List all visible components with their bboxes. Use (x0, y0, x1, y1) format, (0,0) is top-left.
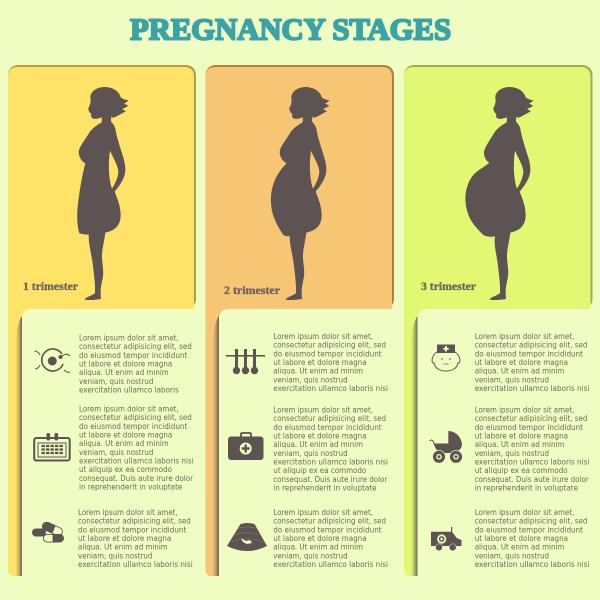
text: second trimester block 2: consequat. Duis aute irure dolor (273, 474, 388, 484)
text: first trimester block 2 (79, 404, 194, 492)
text: second trimester block 3 (273, 507, 388, 569)
text: second trimester block 2: veniam, quis nostrud (273, 448, 348, 458)
text: third trimester block 3: aliqua. Ut enim ad minim (475, 542, 564, 552)
text: first trimester block 2: aliqua. Ut enim ad minim (79, 438, 169, 448)
text: third trimester block 3: ut labore et dolore magna (475, 533, 568, 543)
text: second trimester block 2: Lorem ipsum dolor sit amet, (273, 404, 373, 414)
icon: ambulance (431, 527, 462, 551)
text: third trimester block 1: Lorem ipsum dolor sit amet, (475, 331, 574, 341)
text: first trimester block 1 (79, 332, 192, 394)
panel: third trimester (404, 65, 592, 576)
silhouette: first trimester (77, 87, 129, 300)
text: second trimester block 3: aliqua. Ut enim ad minim (273, 542, 363, 552)
text: first trimester block 2: ut aliquip ex ea commodo (79, 464, 172, 474)
panel: second trimester (206, 65, 394, 576)
text: first trimester block 3: exercitation ullamco laboris nisi (78, 559, 193, 569)
text: third trimester block 2: do eiusmod tempor incididunt (475, 422, 584, 432)
text: first trimester block 3: Lorem ipsum dolor sit amet, (78, 507, 178, 517)
text: first trimester block 1: consectetur adipisicing elit, sed (79, 341, 192, 351)
text: first trimester block 2: in reprehenderit in voluptate (79, 482, 182, 492)
text: first trimester block 3: consectetur adipisicing elit, sed (78, 516, 191, 526)
text: first trimester block 1: exercitation ullamco laboris (79, 384, 179, 394)
text: first trimester block 1: veniam, quis nostrud (79, 376, 153, 386)
text: first trimester block 2: Lorem ipsum dolor sit amet, (79, 404, 179, 414)
icon: ultrasound scan (227, 523, 267, 551)
text: second trimester block 1: Lorem ipsum dolor sit amet, (273, 331, 373, 341)
label: 2 trimester: 2 trimester (224, 285, 280, 297)
text: third trimester block 2 (475, 404, 589, 492)
label: 1 trimester: 1 trimester (23, 281, 78, 293)
text: first trimester block 1: aliqua. Ut enim ad minim (79, 367, 169, 377)
text: first trimester block 3 (78, 507, 193, 569)
text: third trimester block 3: Lorem ipsum dolor sit amet, (475, 507, 574, 517)
text: third trimester block 1: veniam, quis nostrud (475, 374, 549, 384)
text: first trimester block 1: Lorem ipsum dolor sit amet, (79, 332, 179, 342)
text: second trimester block 1: exercitation ullamco laboris nisi (273, 383, 388, 393)
text: second trimester block 1: veniam, quis nostrud (273, 374, 348, 384)
icon: sperm and egg (34, 349, 70, 372)
text: third trimester block 2: ut aliquip ex ea commodo (475, 465, 568, 475)
icon: baby stroller (430, 431, 462, 463)
text: first trimester block 2: consectetur adipisicing elit, sed (79, 412, 192, 422)
text: second trimester block 2: ut aliquip ex ea commodo (273, 465, 366, 475)
text: third trimester block 1: aliqua. Ut enim ad minim (475, 366, 564, 376)
text: second trimester block 1: aliqua. Ut enim ad minim (273, 366, 363, 376)
text: first trimester block 3: veniam, quis nostrud (78, 550, 152, 560)
icon: medical kit (228, 433, 264, 460)
text: second trimester block 3: do eiusmod tempor incididunt (273, 524, 382, 534)
label: 3 trimester: 3 trimester (421, 281, 476, 293)
text: third trimester block 2: in reprehenderit in voluptate (475, 482, 578, 492)
text: third trimester block 2: aliqua. Ut enim ad minim (475, 439, 564, 449)
text: first trimester block 3: do eiusmod tempor incididunt (78, 524, 187, 534)
text: second trimester block 1: do eiusmod tempor incididunt (273, 348, 382, 358)
text: first trimester block 2: consequat. Duis aute irure dolor (79, 473, 194, 483)
text: second trimester block 2 (273, 404, 388, 492)
text: first trimester block 2: do eiusmod tempor incididunt (79, 421, 188, 431)
text: third trimester block 2: ut labore et dolore magna (475, 430, 568, 440)
text: second trimester block 1: ut labore et dolore magna (273, 357, 367, 367)
text: third trimester block 1 (475, 331, 589, 393)
text: second trimester block 2: exercitation ullamco laboris nisi (273, 456, 388, 466)
text: third trimester block 2: veniam, quis nostrud (475, 448, 549, 458)
icon: calendar (34, 433, 70, 460)
icon: pills (32, 521, 64, 542)
text: first trimester block 2: veniam, quis nostrud (79, 447, 153, 457)
text: first trimester block 2: ut labore et dolore magna (79, 430, 172, 440)
text: second trimester block 2: ut labore et dolore magna (273, 430, 367, 440)
text: third trimester block 3: veniam, quis nostrud (475, 550, 549, 560)
icon: baby in nurse hat (432, 344, 460, 371)
text: second trimester block 2: do eiusmod tempor incididunt (273, 422, 382, 432)
text: second trimester block 2: in reprehenderit in voluptate (273, 482, 377, 492)
text: first trimester block 1: ut labore et dolore magna (79, 358, 172, 368)
panel: first trimester (8, 65, 196, 576)
text: third trimester block 1: do eiusmod tempor incididunt (475, 348, 584, 358)
text: second trimester block 3: ut labore et dolore magna (273, 533, 367, 543)
silhouette: third trimester (465, 87, 534, 300)
text: first trimester block 3: ut labore et dolore magna (78, 533, 171, 543)
text: second trimester block 3: veniam, quis nostrud (273, 550, 348, 560)
text: third trimester block 1: ut labore et dolore magna (475, 357, 568, 367)
text: second trimester block 1: consectetur adipisicing elit, sed (273, 340, 386, 350)
title: PREGNANCY STAGES (130, 12, 451, 46)
text: second trimester block 2: consectetur adipisicing elit, sed (273, 413, 386, 423)
icon: test tubes (226, 349, 265, 374)
text: second trimester block 3: exercitation ullamco laboris nisi (273, 559, 388, 569)
text: first trimester block 2: exercitation ullamco laboris nisi (79, 456, 194, 466)
text: third trimester block 2: Lorem ipsum dolor sit amet, (475, 404, 574, 414)
silhouette: second trimester (271, 87, 330, 300)
text: third trimester block 3 (475, 507, 589, 569)
text: second trimester block 3: Lorem ipsum dolor sit amet, (273, 507, 373, 517)
text: first trimester block 3: aliqua. Ut enim ad minim (78, 542, 168, 552)
text: third trimester block 3: do eiusmod tempor incididunt (475, 524, 584, 534)
text: second trimester block 1 (273, 331, 388, 393)
text: second trimester block 3: consectetur adipisicing elit, sed (273, 516, 386, 526)
text: first trimester block 1: do eiusmod tempor incididunt (79, 350, 188, 360)
text: second trimester block 2: aliqua. Ut enim ad minim (273, 439, 363, 449)
